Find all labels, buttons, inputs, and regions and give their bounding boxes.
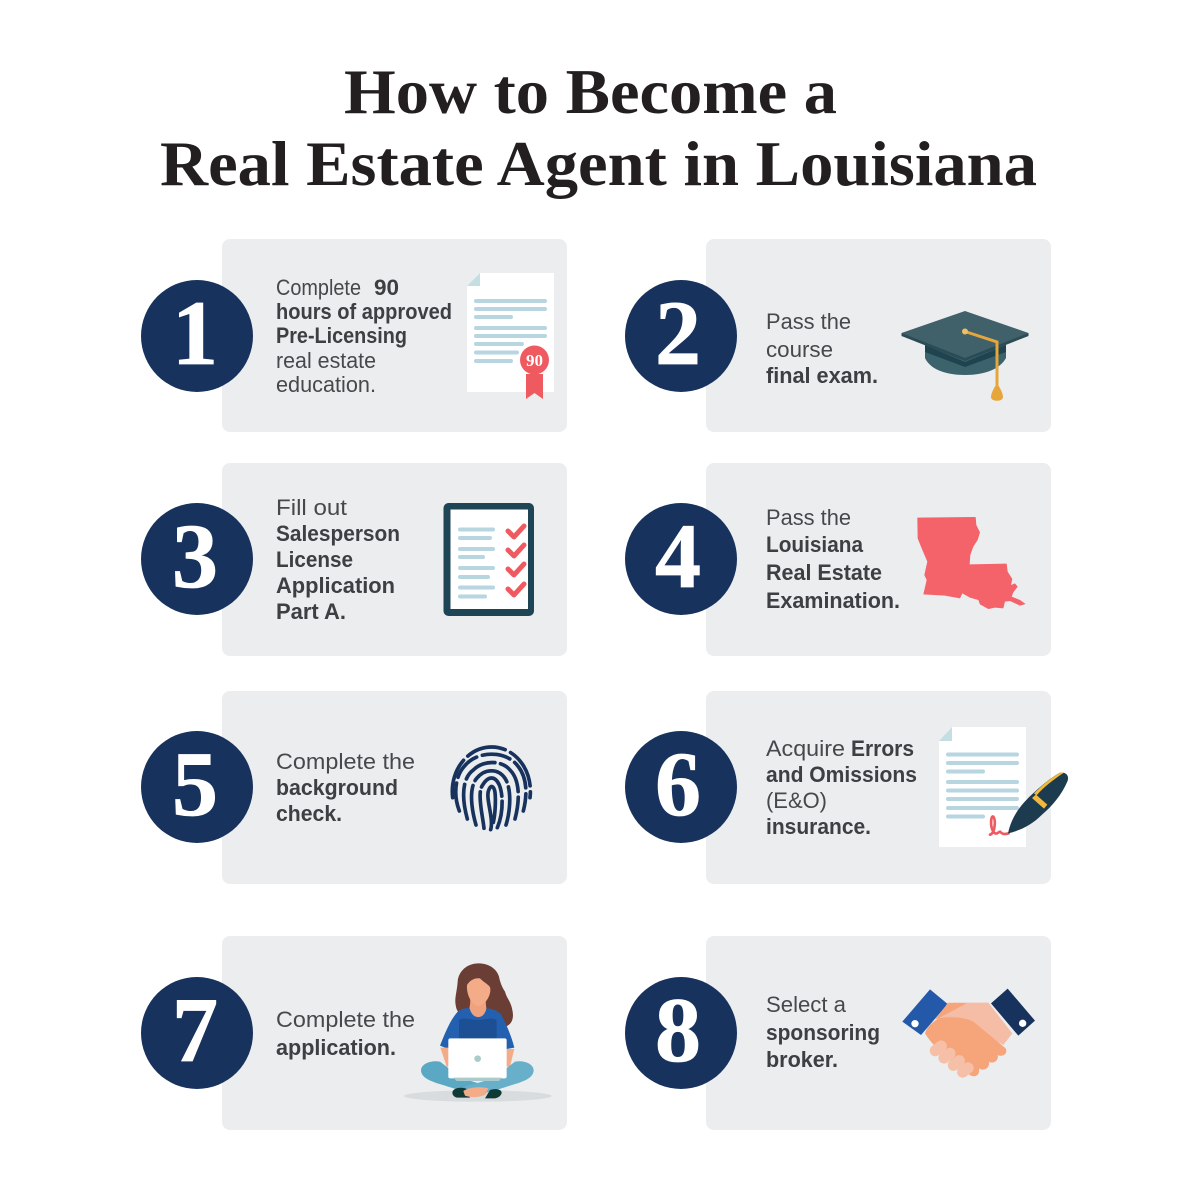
panel: step 5 xyxy=(141,691,567,884)
number badge 1 xyxy=(141,280,253,392)
icon: checklist xyxy=(444,503,534,616)
number badge 8 xyxy=(625,977,737,1089)
panel: step 2 xyxy=(625,239,1051,432)
title xyxy=(160,56,1037,199)
number badge 4 xyxy=(625,503,737,615)
step 5 text xyxy=(276,749,415,826)
icon: handshake xyxy=(902,989,1035,1080)
icon: fingerprint xyxy=(452,747,530,830)
step 1 text: Complete xyxy=(276,275,361,300)
number badge 2 xyxy=(625,280,737,392)
step 5 text: background xyxy=(276,775,398,800)
step 4 text: Louisiana xyxy=(766,532,864,557)
icon: certificate with 90 seal xyxy=(467,273,554,399)
step 6 text: (E&O) xyxy=(766,788,827,813)
number badge 5 xyxy=(141,731,253,843)
step 6 text: Errors xyxy=(851,736,914,761)
step 5 text: Complete the xyxy=(276,749,415,774)
number badge 3 xyxy=(141,503,253,615)
step 3 text: Salesperson xyxy=(276,521,400,546)
step 4 text xyxy=(766,505,900,613)
number badge 3: 3 xyxy=(172,505,218,607)
step 8 text: Select a xyxy=(766,992,847,1017)
title: How to Become a xyxy=(344,56,837,127)
number badge 1: 1 xyxy=(172,282,218,384)
icon: signed document with pen xyxy=(939,727,1068,847)
step 6 text: insurance. xyxy=(766,814,871,839)
step 1 text: hours of approved xyxy=(276,299,452,324)
panel: step 8 xyxy=(625,936,1051,1130)
panel: step 7 xyxy=(141,936,567,1130)
number badge 7 xyxy=(141,977,253,1089)
step 2 text: final exam. xyxy=(766,363,878,388)
step 1 text xyxy=(276,275,452,397)
number badge 4: 4 xyxy=(655,505,701,607)
step 6 text: and Omissions xyxy=(766,762,917,787)
step 5 text: check. xyxy=(276,801,342,826)
step 8 text: sponsoring xyxy=(766,1020,880,1045)
step 3 text: License xyxy=(276,547,353,572)
icon: graduation cap xyxy=(902,311,1028,401)
step 3 text: Fill out xyxy=(276,495,347,520)
panel: step 6 xyxy=(625,691,1068,884)
step 4 text: Examination. xyxy=(766,588,900,613)
number badge 6 xyxy=(625,731,737,843)
step 2 text xyxy=(766,309,878,388)
panel: step 3 xyxy=(141,463,567,656)
step 1 text: real estate xyxy=(276,348,376,373)
number badge 8: 8 xyxy=(655,979,701,1081)
step 1 text: Pre-Licensing xyxy=(276,323,407,348)
number badge 5: 5 xyxy=(172,733,218,835)
step 8 text xyxy=(766,992,880,1072)
step 6 text: Acquire xyxy=(766,736,845,761)
step 6 text xyxy=(766,736,917,839)
step 3 text: Part A. xyxy=(276,599,346,624)
step 4 text: Real Estate xyxy=(766,560,882,585)
icon: Louisiana map xyxy=(917,517,1026,609)
number badge 2: 2 xyxy=(655,282,701,384)
icon: certificate with 90 seal: 90 xyxy=(526,351,543,370)
number badge 6: 6 xyxy=(655,733,701,835)
icon: woman with laptop xyxy=(404,963,552,1102)
step 4 text: Pass the xyxy=(766,505,851,530)
number badge 7: 7 xyxy=(172,979,218,1081)
panel: step 4 xyxy=(625,463,1051,656)
step 3 text xyxy=(276,495,400,624)
step 1 text: 90 xyxy=(374,275,399,300)
step 2 text: course xyxy=(766,337,833,362)
step 7 text xyxy=(276,1007,415,1060)
step 3 text: Application xyxy=(276,573,395,598)
step 7 text: Complete the xyxy=(276,1007,415,1032)
panel: step 1 xyxy=(141,239,567,432)
step 7 text: application. xyxy=(276,1035,396,1060)
step 2 text: Pass the xyxy=(766,309,851,334)
title: Real Estate Agent in Louisiana xyxy=(160,128,1037,199)
step 8 text: broker. xyxy=(766,1047,838,1072)
step 1 text: education. xyxy=(276,372,376,397)
